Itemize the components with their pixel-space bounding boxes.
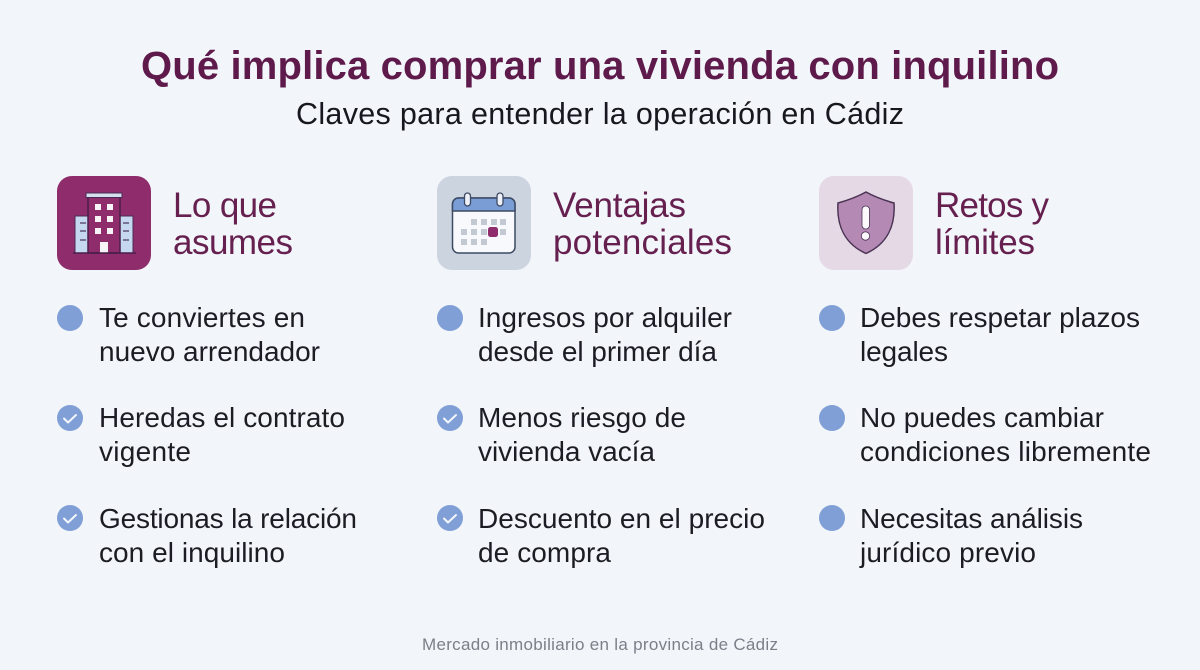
bullet: descuento — [437, 503, 765, 568]
bullet: menos riesgo: Menos riesgo de — [478, 402, 686, 433]
panel: lo que asumes — [57, 176, 357, 568]
bullet: te conviertes: nuevo arrendador — [99, 336, 320, 367]
heading: retos y límites: Retos y — [935, 186, 1050, 225]
bullet: plazos: Debes respetar plazos — [860, 302, 1140, 333]
bullet: condiciones: No puedes cambiar — [860, 402, 1104, 433]
bullet: análisis: jurídico previo — [859, 537, 1036, 568]
panel: ventajas potenciales — [437, 176, 765, 568]
footer: Mercado inmobiliario en la provincia de Cádiz — [422, 635, 778, 654]
bullet: condiciones — [819, 402, 1151, 467]
heading: ventajas potenciales: Ventajas — [553, 186, 686, 225]
bullet: descuento: Descuento en el precio — [478, 503, 765, 534]
heading: lo que asumes: Lo que — [173, 186, 277, 225]
panel: retos y límites — [819, 176, 1151, 568]
bullet: gestionas — [57, 503, 357, 568]
bullet: menos riesgo: vivienda vacía — [478, 436, 655, 467]
bullet: heredas: vigente — [99, 436, 191, 467]
bullet: análisis: Necesitas análisis — [860, 503, 1083, 534]
bullet: ingresos: desde el primer día — [478, 336, 717, 367]
icon: buildings — [57, 176, 151, 270]
title: Qué implica comprar una vivienda con inquilino — [141, 44, 1059, 88]
bullet: menos riesgo — [437, 402, 686, 467]
bullet: gestionas: Gestionas la relación — [99, 503, 357, 534]
bullet: te conviertes: Te conviertes en — [99, 302, 305, 333]
bullet: plazos: legales — [860, 336, 948, 367]
bullet: análisis — [819, 503, 1083, 568]
bullet: heredas: Heredas el contrato — [99, 402, 345, 433]
bullet: heredas — [57, 402, 345, 467]
heading: retos y límites: límites — [935, 223, 1035, 262]
heading: ventajas potenciales: potenciales — [553, 223, 732, 262]
icon: shield — [819, 176, 913, 270]
heading: lo que asumes: asumes — [173, 223, 293, 262]
icon: calendar — [437, 176, 531, 270]
bullet: descuento: de compra — [478, 537, 611, 568]
subtitle: Claves para entender la operación en Cádiz — [296, 97, 904, 131]
bullet: plazos — [819, 302, 1140, 367]
bullet: condiciones: condiciones libremente — [860, 436, 1151, 467]
bullet: ingresos — [437, 302, 732, 367]
bullet: gestionas: con el inquilino — [99, 537, 285, 568]
bullet: ingresos: Ingresos por alquiler — [478, 302, 732, 333]
bullet: te conviertes — [57, 302, 320, 367]
